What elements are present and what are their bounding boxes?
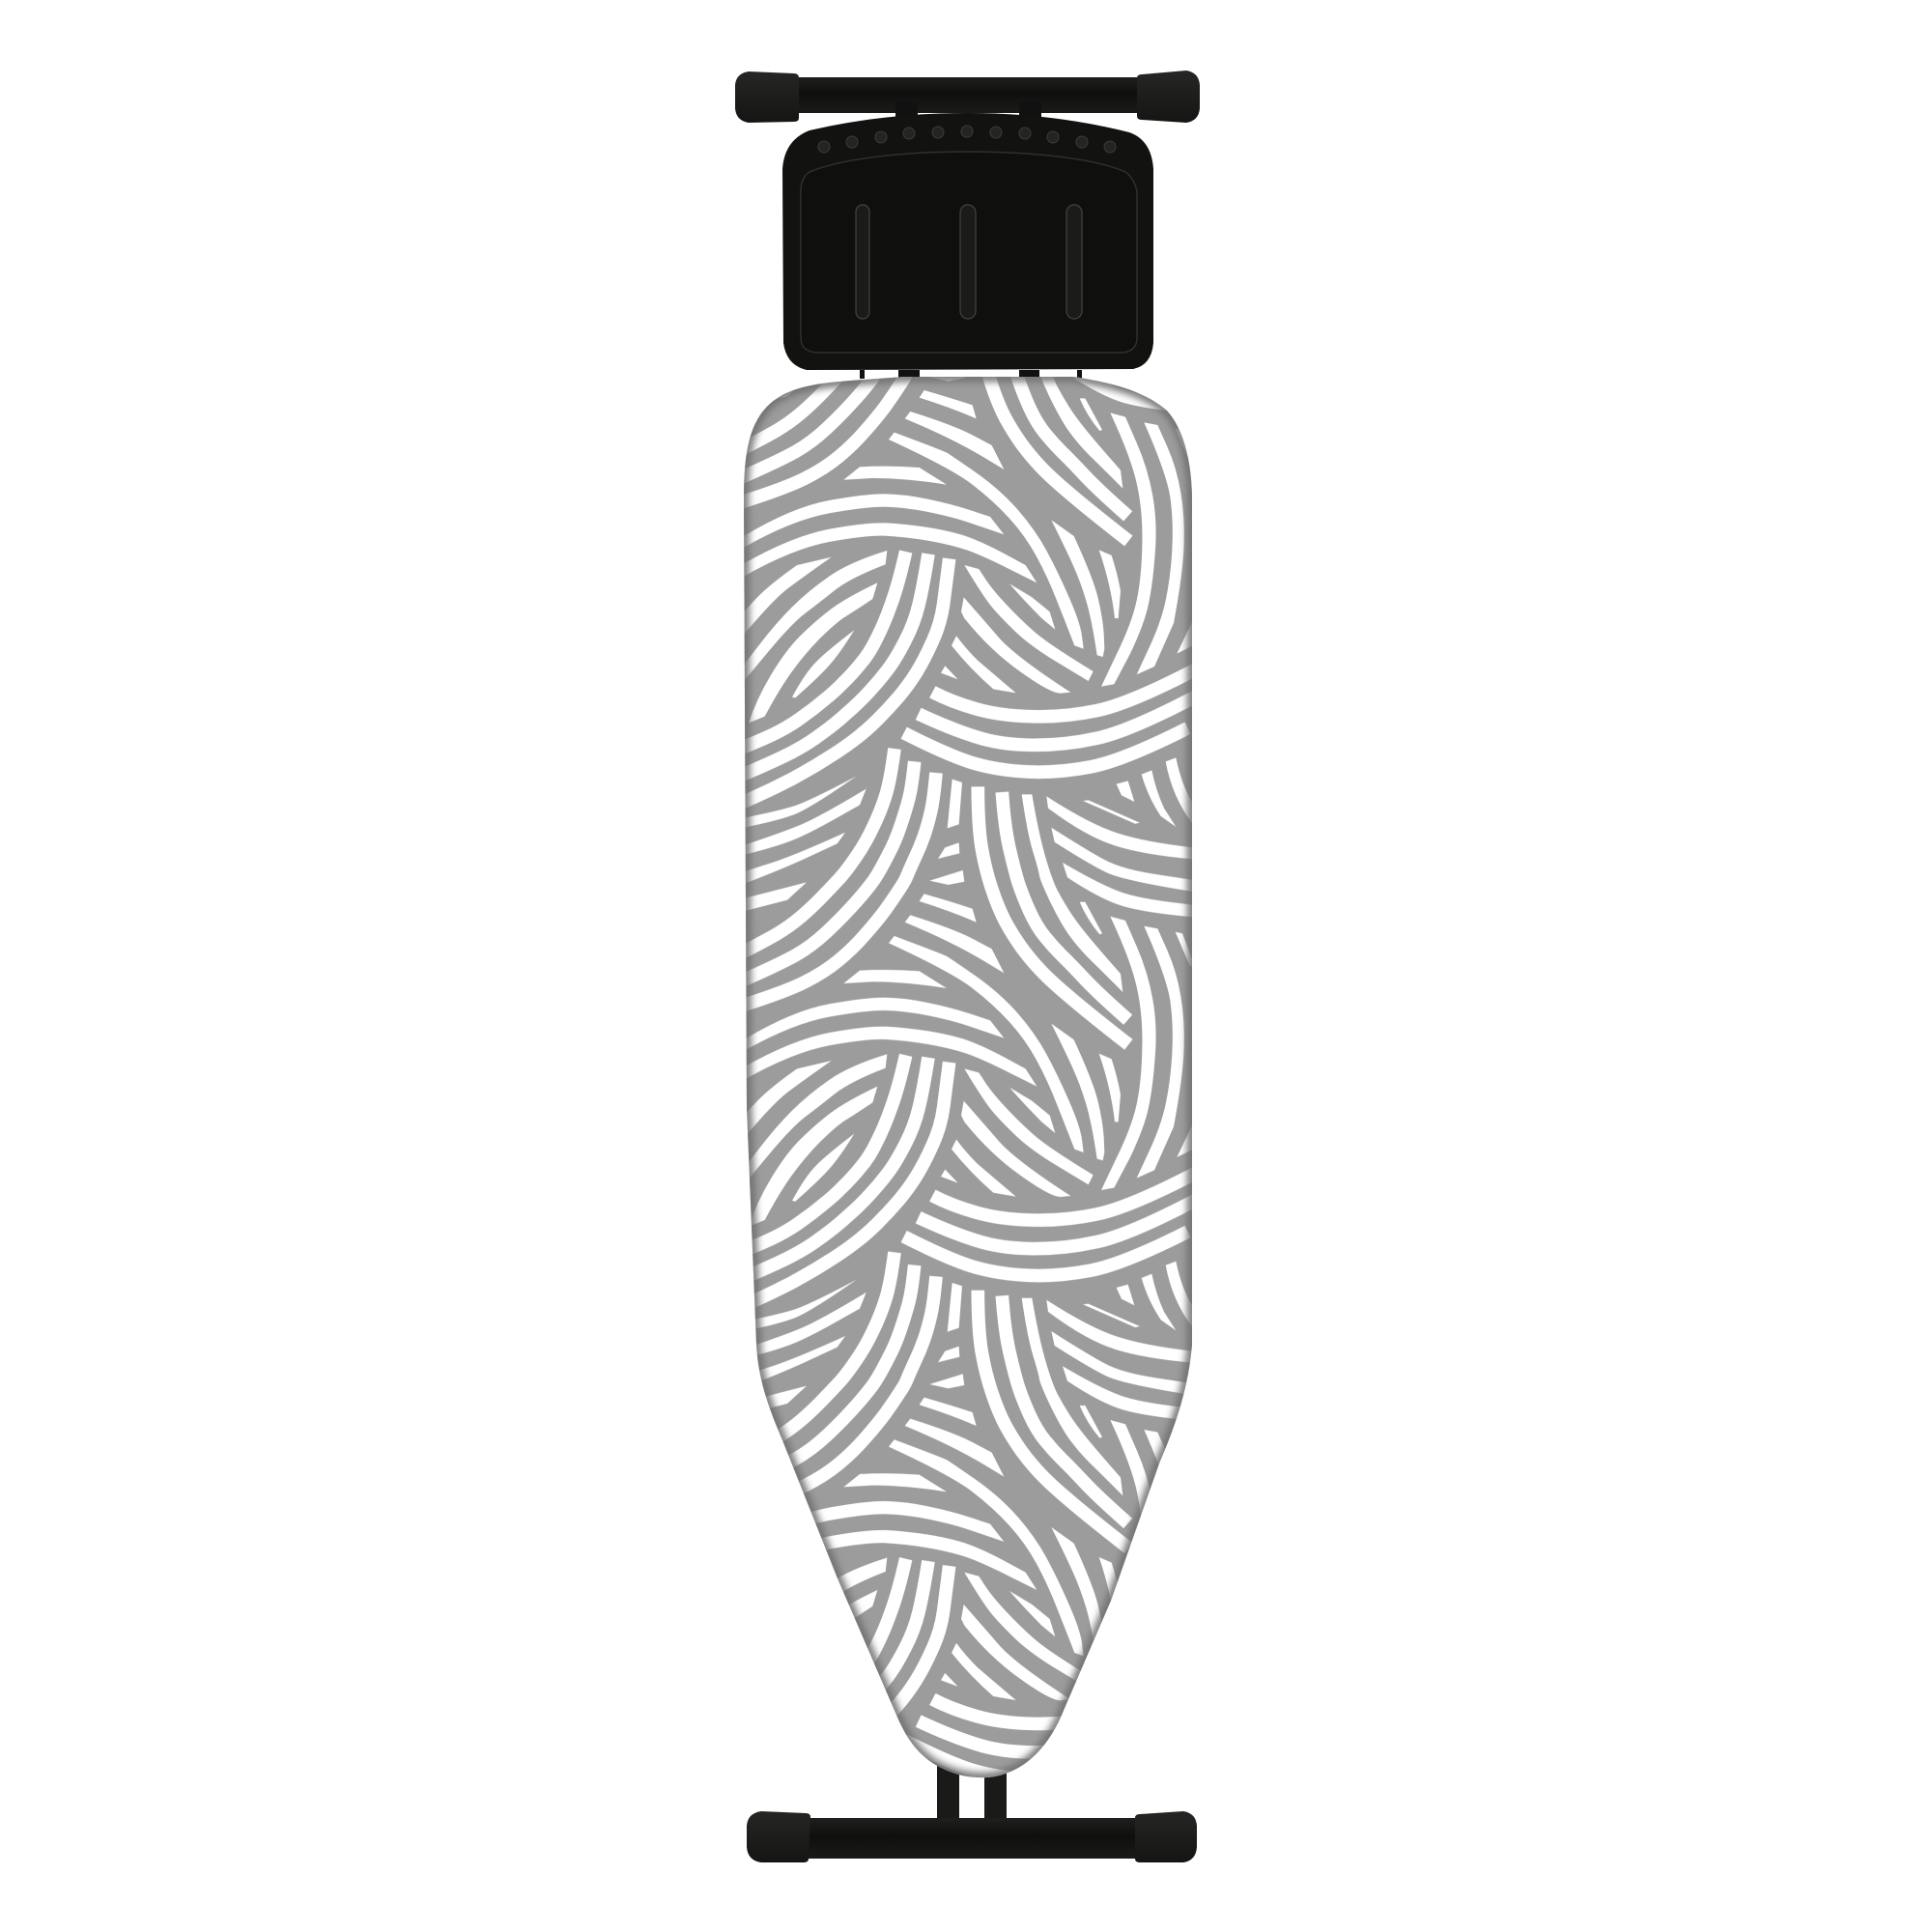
board edge shading	[744, 377, 1192, 1777]
ironing board illustration	[735, 71, 1200, 1862]
hinge clips	[895, 102, 1041, 118]
stand cross bar	[807, 1818, 1140, 1859]
plate rivets	[818, 126, 1116, 153]
top bar left foot cap	[735, 71, 799, 123]
ironing board cover with swirl pattern	[734, 367, 1208, 1787]
stand legs	[937, 1763, 1007, 1831]
top bar right foot cap	[1137, 71, 1200, 123]
bottom bar right foot cap	[1135, 1811, 1197, 1862]
plate support struts	[860, 370, 1082, 379]
plate slots	[856, 205, 1082, 319]
bottom stand	[747, 1763, 1197, 1862]
iron rest plate	[782, 113, 1153, 379]
plate inset outline	[801, 152, 1137, 353]
top cross bar	[735, 71, 1200, 123]
bottom bar left foot cap	[747, 1811, 810, 1862]
swirl pattern fill	[734, 367, 1208, 1787]
